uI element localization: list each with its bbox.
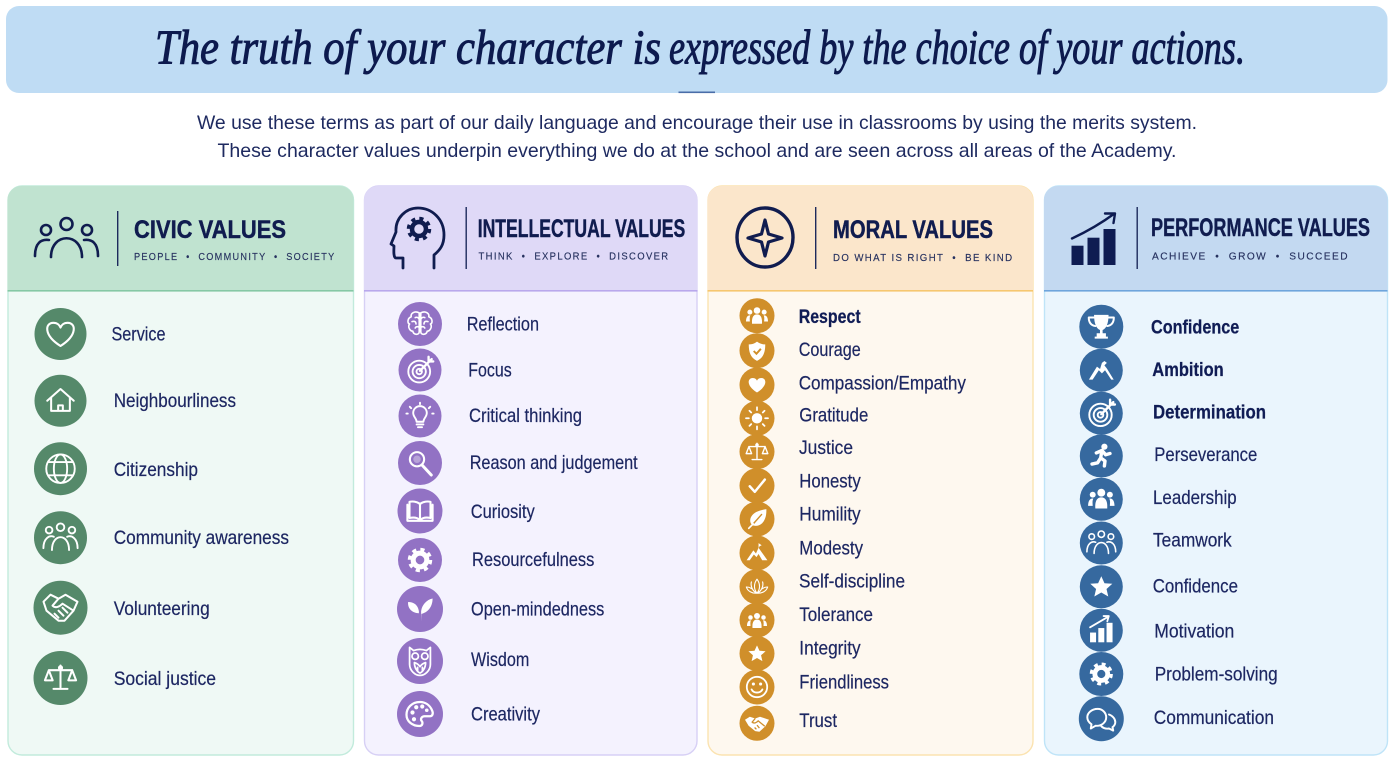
intellectual value list: Resourcefulness (472, 549, 595, 571)
moral value list: Honesty (799, 470, 861, 492)
moral value list: Friendliness (799, 671, 889, 693)
intellectual value list (397, 302, 638, 737)
performance value list (1079, 305, 1278, 741)
civic value list: Volunteering (114, 598, 210, 620)
civic value list: Social justice (114, 668, 216, 690)
icon: compass (737, 208, 793, 267)
introductory text: We use these terms as part of our daily language and encourage their use in classrooms by using the merits system. (197, 112, 1197, 134)
civic header: PEOPLE • COMMUNITY • SOCIETY (134, 251, 336, 263)
intellectual value list: Critical thinking (469, 405, 582, 427)
moral value list (740, 298, 966, 741)
moral value list: Gratitude (799, 405, 868, 427)
performance value list: Teamwork (1153, 530, 1232, 552)
moral value list: Compassion/Empathy (799, 372, 966, 394)
moral value list: Respect (799, 306, 861, 328)
moral value list: Integrity (799, 638, 861, 660)
moral value list: Humility (799, 504, 861, 526)
panel: intellectual values (364, 186, 698, 755)
moral value list: Justice (799, 437, 853, 459)
moral value list: Self-discipline (799, 571, 905, 593)
panel: performance values (1044, 186, 1388, 755)
introductory text (197, 112, 1197, 162)
performance header: ACHIEVE • GROW • SUCCEED (1152, 250, 1349, 262)
title banner: The truth of your character is (155, 20, 661, 74)
intellectual value list: Reason and judgement (470, 452, 638, 474)
moral value list: Tolerance (799, 604, 873, 626)
panel: civic values (8, 186, 354, 755)
performance value list: Perseverance (1154, 444, 1257, 466)
moral header (708, 186, 1033, 292)
introductory text: These character values underpin everything we do at the school and are seen across all areas of the Academy. (218, 140, 1176, 162)
civic value list (34, 308, 289, 705)
performance header (1044, 186, 1388, 292)
civic value list: Service (112, 324, 166, 346)
intellectual value list: Curiosity (471, 501, 535, 523)
performance value list: Confidence (1153, 576, 1238, 598)
intellectual header (364, 186, 698, 292)
civic value list: Community awareness (114, 527, 289, 549)
performance value list: Problem-solving (1155, 664, 1278, 686)
intellectual value list: Reflection (467, 314, 539, 336)
moral header: DO WHAT IS RIGHT • BE KIND (833, 252, 1014, 264)
title banner (6, 6, 1388, 93)
intellectual value list: Wisdom (471, 649, 529, 671)
performance value list: Ambition (1152, 359, 1224, 381)
moral value list: Trust (799, 710, 837, 732)
icon: head with gear (391, 208, 444, 268)
intellectual header: THINK • EXPLORE • DISCOVER (478, 250, 670, 262)
icon: rising bar chart (1072, 214, 1116, 265)
panel: moral values (708, 186, 1033, 755)
civic value list: Neighbourliness (114, 390, 236, 412)
civic header: CIVIC VALUES (134, 216, 286, 244)
intellectual value list: Creativity (471, 703, 540, 725)
intellectual header: INTELLECTUAL VALUES (478, 215, 685, 243)
moral header: MORAL VALUES (833, 216, 993, 244)
intellectual value list: Focus (468, 360, 512, 382)
performance value list: Motivation (1154, 620, 1234, 642)
civic header (8, 186, 354, 292)
performance value list: Leadership (1153, 487, 1237, 509)
intellectual value list: Open-mindedness (471, 598, 605, 620)
performance value list: Communication (1154, 707, 1274, 729)
moral value list: Modesty (799, 537, 863, 559)
performance value list: Confidence (1151, 316, 1239, 338)
civic value list: Citizenship (114, 459, 198, 481)
performance value list: Determination (1153, 402, 1266, 424)
icon: people (35, 218, 98, 257)
moral value list: Courage (799, 339, 861, 361)
